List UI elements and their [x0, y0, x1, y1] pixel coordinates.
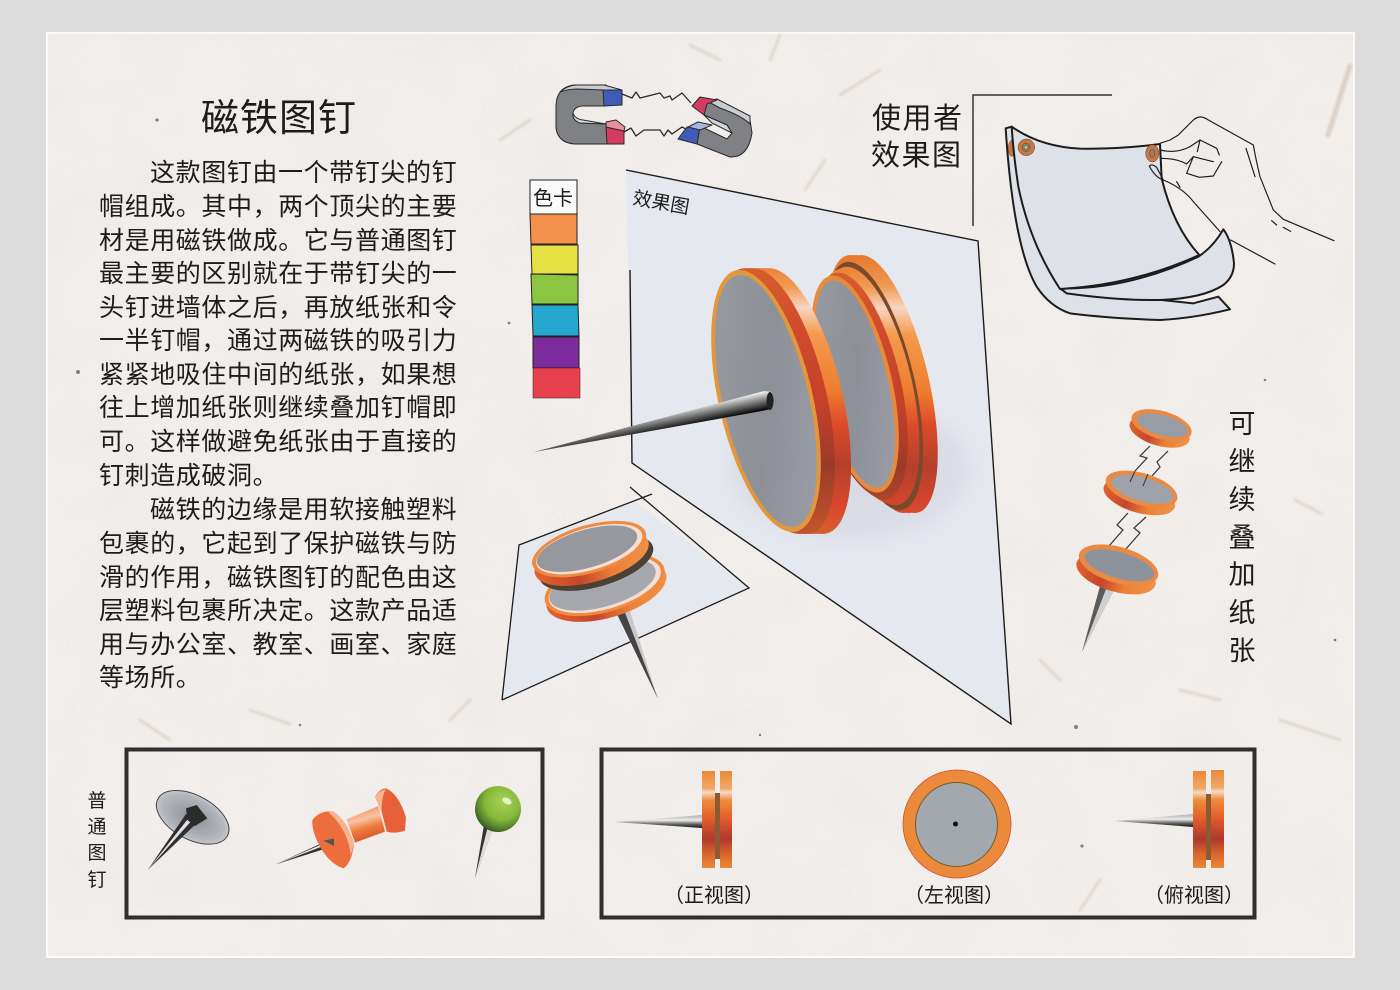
description text block: 等场所。	[99, 664, 201, 692]
view labels: （左视图）	[904, 884, 1004, 907]
description text block: 头钉进墙体之后，再放纸张和令	[99, 294, 457, 322]
heading: user effect: 使用者	[872, 102, 964, 135]
view labels: （俯视图）	[1144, 884, 1244, 907]
lower disc	[538, 542, 673, 634]
needle	[534, 391, 774, 452]
vertical label: ordinary pushpins: 钉	[87, 869, 107, 891]
description text block: 钉刺造成破洞。	[99, 462, 278, 490]
description text block: 包裹的，它起到了保护磁铁与防	[99, 530, 457, 558]
vertical label: continue stacking paper: 张	[1228, 636, 1256, 666]
vertical label: continue stacking paper	[1228, 409, 1256, 666]
heading: user effect: 效果图	[871, 139, 963, 172]
top disc	[1126, 403, 1195, 454]
upper disc	[526, 509, 660, 603]
description text block: 磁铁的边缘是用软接触塑料	[150, 496, 457, 524]
vertical label: ordinary pushpins: 普	[87, 790, 107, 812]
right pin	[1146, 145, 1159, 162]
description text block: 紧紧地吸住中间的纸张，如果想	[99, 361, 457, 389]
description text block: 可。这样做避免纸张由于直接的	[99, 428, 457, 456]
description text block: 用与办公室、教室、画室、家庭	[99, 631, 457, 659]
view labels: （正视图）	[664, 884, 764, 907]
vertical label: continue stacking paper: 纸	[1228, 598, 1256, 628]
description text block: 往上增加纸张则继续叠加钉帽即	[99, 394, 457, 422]
title: 磁铁图钉	[201, 98, 357, 140]
panel: small perspective view	[502, 487, 749, 700]
vertical label: continue stacking paper: 可	[1228, 409, 1256, 439]
magnetic lightning lines	[1109, 446, 1168, 550]
vertical label: continue stacking paper: 续	[1228, 485, 1256, 515]
description text block: 最主要的区别就在于带钉尖的一	[99, 260, 457, 288]
back pin	[1008, 140, 1015, 156]
view labels	[664, 884, 1244, 907]
vertical label: continue stacking paper: 叠	[1228, 523, 1256, 553]
illustration: hand holding paper with magnet pins	[1006, 117, 1334, 320]
vertical label: ordinary pushpins: 通	[87, 816, 107, 838]
top view	[1115, 770, 1224, 868]
needle	[616, 612, 658, 699]
icon: green ball pin	[475, 786, 521, 878]
vertical label: continue stacking paper: 加	[1228, 560, 1256, 590]
description text block: 滑的作用，磁铁图钉的配色由这	[99, 564, 457, 592]
middle disc	[1099, 463, 1182, 522]
front sheet	[1012, 127, 1199, 289]
vertical label: ordinary pushpins	[87, 790, 107, 891]
panel: stacking diagram	[1072, 403, 1195, 652]
icon: orange push pin	[276, 788, 406, 868]
label: color card: 色卡	[533, 187, 573, 210]
front view	[615, 771, 732, 868]
description text block: 这款图钉由一个带钉尖的钉	[150, 159, 457, 187]
icon: attracting horseshoe magnets	[556, 85, 752, 157]
panel: orthographic views	[602, 750, 1254, 918]
heading: user effect	[871, 102, 964, 172]
front magnet disc	[690, 258, 872, 544]
bottom disc	[1072, 536, 1163, 602]
fold	[1060, 229, 1234, 300]
lightning tail	[1130, 471, 1148, 486]
paper shadow	[730, 400, 970, 540]
description text block	[99, 159, 457, 692]
back sheet	[1006, 127, 1230, 320]
vertical label: ordinary pushpins: 图	[87, 843, 107, 864]
label: effect image: 效果图	[631, 187, 691, 219]
panel: ordinary pushpins	[126, 750, 542, 918]
left view	[903, 770, 1011, 878]
panel: main effect drawing	[534, 170, 1011, 724]
description text block: 帽组成。其中，两个顶尖的主要	[99, 193, 457, 221]
left pin	[1018, 139, 1035, 156]
description text block: 层塑料包裹所决定。这款产品适	[99, 597, 457, 625]
color card legend	[530, 180, 580, 398]
description text block: 一半钉帽，通过两磁铁的吸引力	[99, 327, 457, 355]
description text block: 材是用磁铁做成。它与普通图钉	[99, 227, 457, 255]
hand outline	[1149, 117, 1334, 264]
needle	[1082, 586, 1113, 652]
back magnet disc	[794, 246, 958, 522]
vertical label: continue stacking paper: 继	[1228, 447, 1256, 477]
paper plane	[626, 170, 1011, 724]
bracket line	[973, 95, 1112, 226]
icon: metal thumbtack	[148, 779, 238, 870]
